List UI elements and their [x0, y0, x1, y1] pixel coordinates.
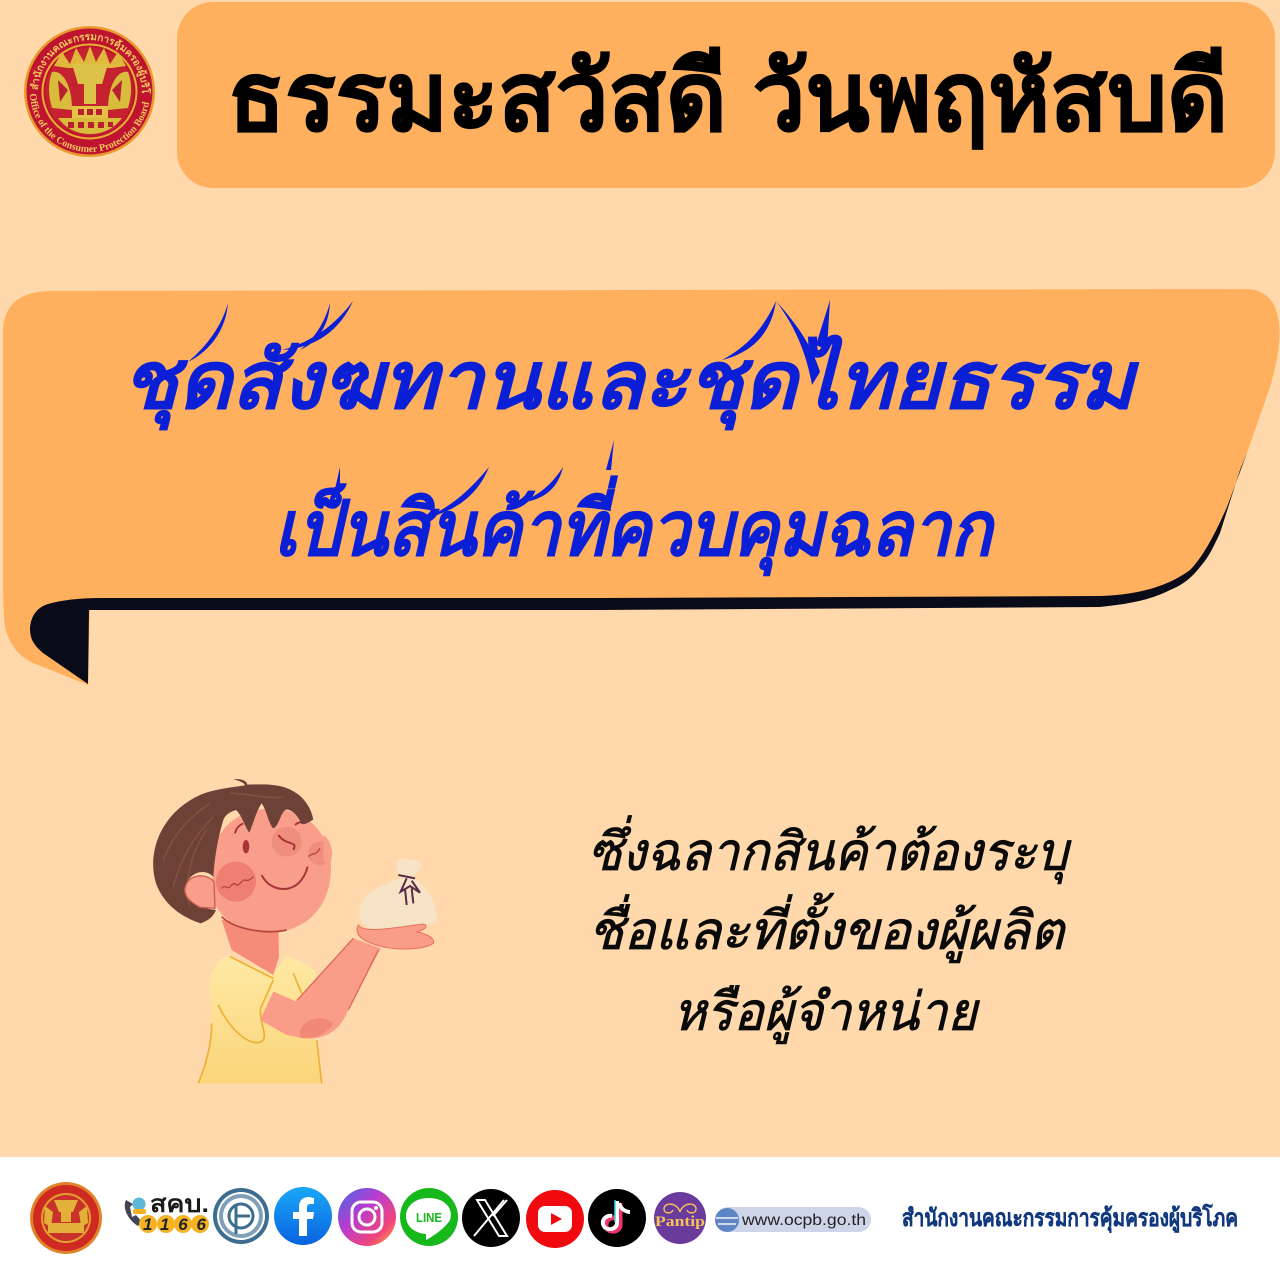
shirt lines: [198, 957, 322, 1083]
icon: line: LINE: [416, 1210, 442, 1225]
ear: [185, 876, 215, 908]
footer: [0, 1157, 1280, 1280]
icon: instagram: [338, 1188, 396, 1246]
logo: office seal: [24, 26, 155, 157]
hotline logo 1166: สคบ.: [150, 1191, 209, 1218]
ribbon banner: [3, 289, 1280, 685]
body line 2: ชื่อและที่ตั้งของผู้ผลิต: [588, 892, 1067, 963]
chin line: [222, 917, 287, 932]
icon: youtube: [526, 1190, 584, 1248]
face: [212, 808, 331, 933]
icon: line: [400, 1188, 458, 1246]
hair: [153, 779, 313, 923]
icon: facebook: [274, 1187, 332, 1245]
body line 1: ซึ่งฉลากสินค้าต้องระบุ: [588, 815, 1072, 884]
ribbon heading line 1: ชุดสังฆทานและชุดไทยธรรม: [122, 334, 1139, 431]
hotline logo 1166: [125, 1191, 209, 1234]
icon: OCPB circle: [213, 1188, 269, 1244]
ribbon orange body: [3, 289, 1280, 685]
heading flourishes: [188, 300, 830, 518]
hair streaks: [163, 793, 283, 907]
smile: [262, 867, 308, 889]
cheek swirl marks: [222, 848, 320, 888]
hotline logo 1166: 1166: [143, 1215, 207, 1234]
icon: pantip: Pantip: [655, 1214, 705, 1230]
ribbon black fold: [30, 453, 1247, 684]
eye: [243, 840, 249, 853]
website pill: [715, 1207, 871, 1232]
bag: [360, 859, 437, 930]
hand: [357, 924, 434, 949]
website pill: www.ocpb.go.th: [741, 1212, 866, 1229]
header banner: [177, 2, 1275, 188]
icon: pantip: [654, 1192, 706, 1244]
illustration: child holding bag: [153, 779, 437, 1083]
neck: [222, 920, 279, 975]
body text: [588, 815, 1072, 1044]
cheeks: [216, 862, 256, 902]
footer seal: [30, 1182, 102, 1254]
ear right: [323, 835, 332, 867]
arm: [260, 938, 381, 1039]
icon: X: [462, 1189, 520, 1247]
logo: office seal: Office of the Consumer Protection Board: [30, 94, 150, 152]
title: ธรรมะสวัสดี วันพฤหัสบดี: [228, 44, 1228, 151]
ribbon heading line 2: เป็นสินค้าที่ควบคุมฉลาก: [274, 475, 996, 576]
body line 3: หรือผู้จำหน่าย: [673, 983, 980, 1044]
icon: tiktok: [588, 1189, 646, 1247]
shirt: [198, 957, 322, 1083]
